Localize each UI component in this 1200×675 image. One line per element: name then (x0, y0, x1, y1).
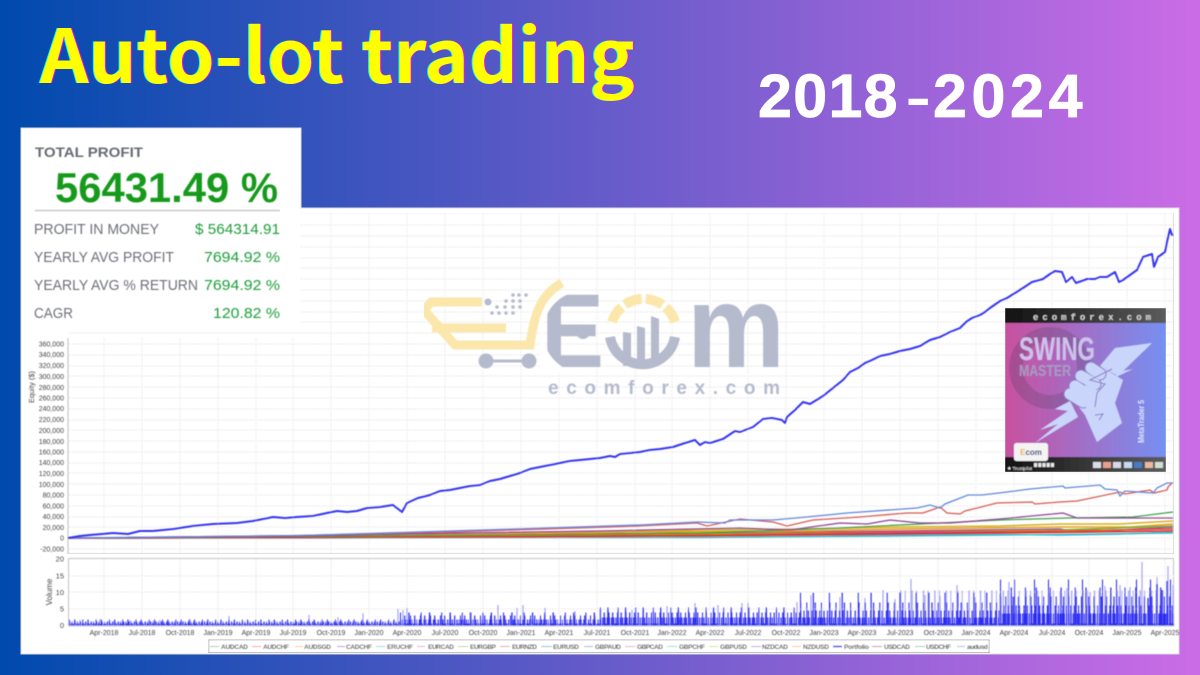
date range heading: – (909, 81, 927, 118)
trustpilot rating (1007, 465, 1054, 472)
equity line chart (27, 213, 1174, 554)
x axis labels: Apr-2025 (1151, 630, 1180, 637)
badge: ecom logo chip: Ecom (1020, 448, 1042, 457)
stat: yearly average profit: YEARLY AVG PROFIT (34, 250, 174, 266)
chart legend: GBPAUD (595, 644, 621, 651)
y axis labels: equity: -20,000 (40, 546, 64, 554)
x axis labels: Jul-2018 (129, 630, 156, 637)
x axis labels (90, 630, 1180, 637)
x axis labels: Jul-2021 (584, 630, 611, 637)
trustpilot rating: ★ Trustpilot (1007, 466, 1033, 472)
y axis title: volume: Volume (45, 578, 54, 605)
logo domain text: ecomforex.com (548, 378, 780, 399)
chart legend: Portfolio (844, 644, 869, 651)
x axis labels: Jan-2021 (506, 630, 536, 637)
y axis labels: equity: 0 (60, 536, 64, 542)
chart legend: GBPCAD (637, 644, 663, 651)
icon: raised fist (1070, 367, 1123, 442)
logo letter m: m (687, 261, 785, 392)
title: Auto-lot trading (39, 0, 635, 105)
chart legend (208, 640, 990, 653)
volume spikes: light (80, 562, 1174, 625)
x axis labels: Apr-2018 (90, 630, 119, 637)
icon: chart ring (610, 299, 675, 367)
watermark logo: ecomforex (424, 261, 785, 399)
y axis labels: equity: 20,000 (43, 525, 64, 532)
panel: profit statistics (34, 144, 280, 322)
x axis labels: Apr-2024 (1000, 630, 1029, 637)
platform label: MetaTrader 5 (1136, 400, 1146, 443)
chart legend: audusd (967, 644, 988, 651)
chart legend: EURNZD (512, 644, 537, 651)
x axis labels: Oct-2021 (621, 630, 650, 637)
stat: profit in money: $ 564314.91 (195, 221, 280, 238)
x axis labels: Apr-2020 (393, 630, 422, 637)
y axis labels: equity: 120,000 (39, 471, 64, 478)
x axis labels: Oct-2019 (317, 630, 346, 637)
blue instrument line (69, 483, 1173, 538)
title: Auto-lot trading (38, 0, 634, 105)
x axis labels: Jul-2024 (1039, 630, 1066, 637)
y axis labels: equity: 140,000 (39, 460, 64, 467)
chart legend: AUDSGD (304, 644, 331, 651)
x axis labels: Apr-2019 (242, 630, 271, 637)
stat: yearly average profit (34, 249, 280, 266)
y axis labels: equity: 100,000 (39, 482, 64, 489)
red instrument line (69, 483, 1172, 538)
chart legend: USDCHF (926, 644, 951, 651)
y axis labels: volume: 0 (60, 621, 64, 630)
stat: yearly average return (34, 277, 280, 294)
icon: lightning bolt (1035, 343, 1152, 443)
chart legend: NZDCAD (762, 644, 788, 651)
stat: total profit value: 56431.49 % (55, 164, 278, 211)
volume bar chart (45, 554, 1180, 637)
y axis labels: equity: 360,000 (39, 342, 64, 348)
y axis labels: equity: 40,000 (43, 514, 64, 521)
icon: cart wheels (478, 293, 536, 368)
y axis labels: equity: 180,000 (39, 439, 64, 446)
box title: SWING (1019, 331, 1095, 367)
y axis labels: volume: 20 (56, 554, 64, 564)
x axis labels: Jul-2019 (280, 630, 307, 637)
y axis labels: volume: 10 (56, 588, 64, 597)
y axis labels: equity: 220,000 (39, 417, 64, 424)
x axis labels: Apr-2023 (848, 630, 877, 637)
x axis labels: Apr-2021 (545, 630, 574, 637)
chart legend: GBPUSD (720, 644, 747, 651)
chart legend: AUDCHF (263, 644, 289, 651)
y axis labels: equity: 320,000 (39, 363, 64, 370)
logo letter E: E (541, 273, 604, 390)
x axis labels: Jul-2020 (432, 630, 459, 637)
box header bar (1005, 308, 1166, 323)
y axis labels: equity: 60,000 (43, 504, 64, 510)
chart legend: NZDUSD (803, 644, 829, 651)
y axis labels: equity: 80,000 (43, 492, 64, 500)
y axis labels: equity: 200,000 (39, 428, 64, 435)
date range heading: 2018 (758, 62, 899, 130)
x axis labels: Oct-2024 (1075, 630, 1104, 637)
x axis labels: Oct-2023 (924, 630, 953, 637)
badge: ecom logo chip (1014, 443, 1048, 461)
purple instrument line (69, 513, 1173, 538)
y axis labels: equity: 260,000 (39, 396, 64, 402)
ghost logo ring (1016, 334, 1084, 402)
x axis labels: Jan-2019 (203, 630, 233, 637)
x axis labels: Oct-2018 (166, 630, 195, 637)
x axis labels: Jan-2020 (354, 630, 384, 637)
chart legend: GBPCHF (679, 644, 705, 651)
x axis labels: Oct-2020 (469, 630, 498, 637)
box subtitle: MASTER (1019, 363, 1071, 380)
box footer bar (1005, 457, 1166, 472)
product box: Swing Master (1005, 308, 1166, 472)
y axis labels: equity: 340,000 (39, 352, 64, 359)
y axis title: equity: Equity ($) (27, 370, 36, 403)
x axis labels: Jan-2024 (961, 630, 991, 637)
stat: profit in money: PROFIT IN MONEY (34, 222, 159, 238)
instrument equity lines (69, 521, 1173, 538)
stat: cagr: 120.82 % (213, 305, 280, 322)
date range heading: 2024 (933, 62, 1087, 130)
portfolio line (68, 229, 1173, 538)
icon: cart outline (424, 283, 562, 345)
panel: chart background (21, 128, 1179, 654)
y axis labels: equity: 240,000 (39, 406, 64, 413)
stat: cagr: CAGR (34, 306, 73, 322)
chart legend: EURUSD (553, 644, 579, 651)
x axis labels: Jan-2023 (809, 630, 839, 637)
chart legend: AUDCAD (221, 644, 248, 651)
stat: yearly average profit: 7694.92 % (204, 249, 280, 266)
stat: total profit label: TOTAL PROFIT (35, 144, 143, 160)
stat: yearly average return: YEARLY AVG % RETURN (34, 278, 198, 294)
stat: profit in money (34, 221, 280, 238)
chart legend: ERUCHF (387, 644, 413, 651)
x axis labels: Oct-2022 (772, 630, 801, 637)
chart legend: USDCAD (884, 644, 910, 651)
y axis labels: equity: 280,000 (39, 385, 64, 392)
x axis labels: Jan-2022 (657, 630, 687, 637)
y axis labels: equity (39, 342, 64, 554)
chart legend: CADCHF (346, 644, 372, 651)
x axis labels: Jan-2025 (1112, 630, 1142, 637)
x axis labels: Jul-2022 (735, 630, 762, 637)
chart legend: EURGBP (470, 644, 497, 651)
volume spikes: dark (69, 581, 1174, 625)
x axis labels: Jul-2023 (887, 630, 914, 637)
box header text: ecomforex.com (1033, 313, 1152, 323)
y axis labels: equity: 300,000 (39, 374, 64, 381)
y axis labels: equity: 160,000 (39, 450, 64, 456)
y axis labels: volume: 5 (60, 604, 64, 614)
stat: cagr (34, 305, 280, 322)
payment icons (1093, 462, 1163, 468)
stat: yearly average return: 7694.92 % (204, 277, 280, 294)
x axis labels: Apr-2022 (696, 630, 725, 637)
y axis labels: volume: 15 (56, 572, 64, 580)
title: Auto-lot trading (40, 0, 636, 105)
y axis labels: volume (56, 554, 64, 630)
green instrument line (69, 512, 1173, 538)
chart legend: EURCAD (428, 644, 454, 651)
